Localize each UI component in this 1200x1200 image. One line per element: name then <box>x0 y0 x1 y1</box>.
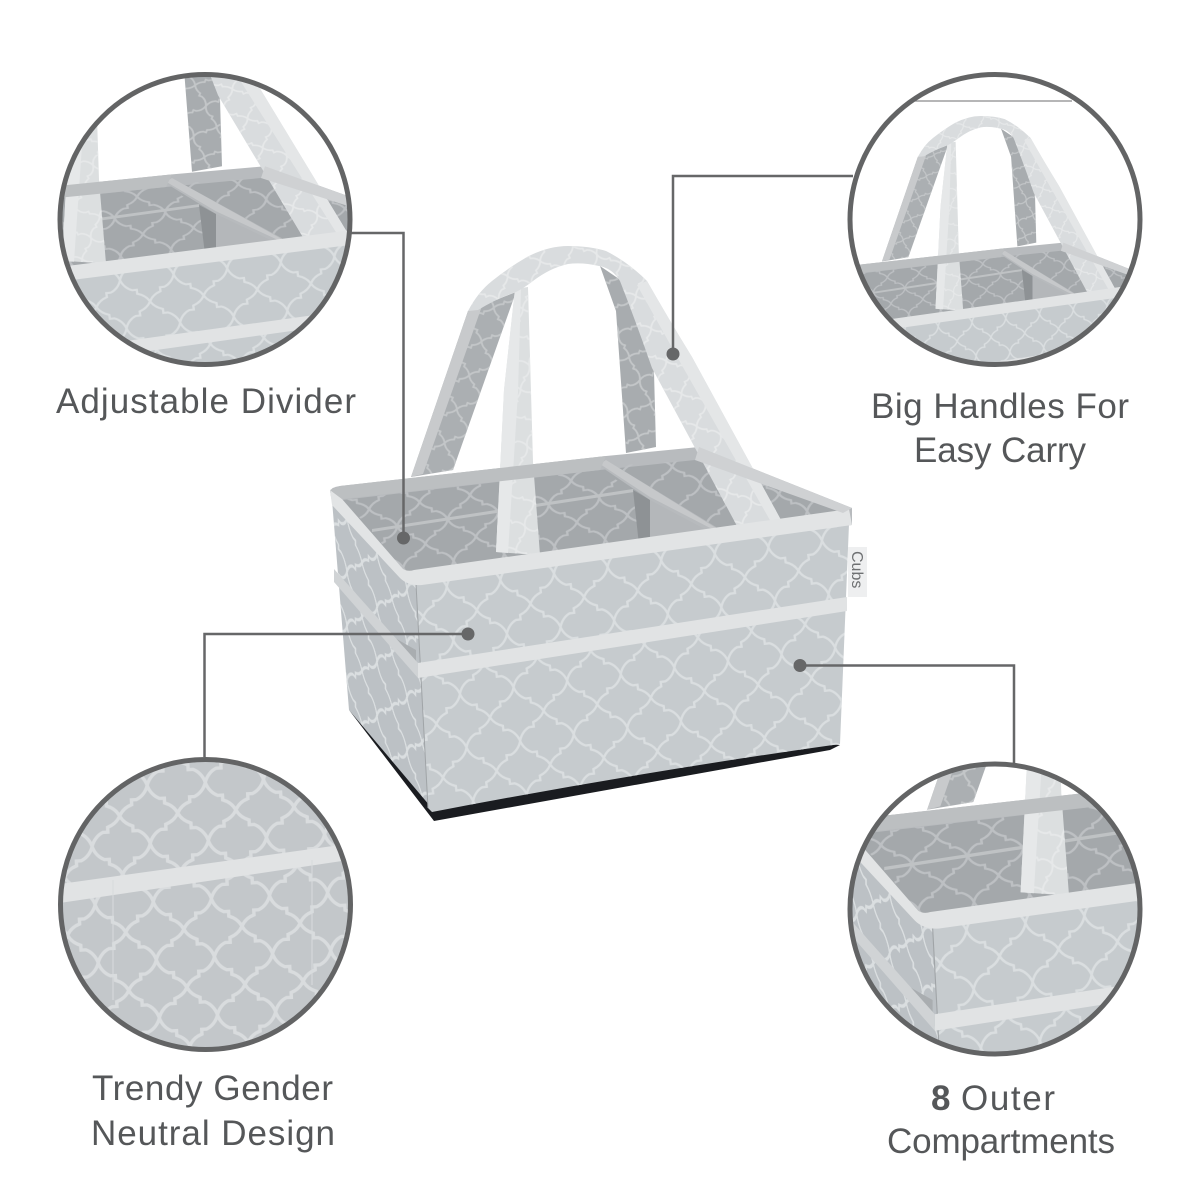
label: outer compartments: Compartments <box>887 1122 1115 1161</box>
caddy interior walls <box>342 460 843 569</box>
label: big handles <box>871 387 1129 470</box>
leader line: big handles <box>666 176 853 360</box>
back right handle leg <box>600 266 656 453</box>
panel: fabric pattern detail circle <box>55 755 355 1055</box>
central product: fabric caddy <box>330 246 852 821</box>
top arc and front right handle leg <box>468 246 781 526</box>
front rim binding <box>330 447 852 585</box>
label: outer compartments: Outer <box>961 1079 1055 1118</box>
label: big handles: Big Handles For <box>871 387 1129 426</box>
caddy back rim <box>330 447 852 585</box>
front left handle leg <box>496 287 540 555</box>
adjustable divider panels <box>372 460 716 578</box>
panel: adjustable divider detail circle <box>58 72 352 367</box>
leader line: adjustable divider <box>345 233 410 544</box>
brand tag <box>848 547 867 597</box>
label: outer compartments <box>887 1079 1115 1161</box>
caddy side panel <box>332 500 428 808</box>
black base <box>349 710 840 821</box>
label: gender neutral design <box>91 1069 335 1153</box>
pocket strap <box>334 569 847 678</box>
label: gender neutral design: Trendy Gender <box>92 1069 333 1108</box>
label: big handles: Easy Carry <box>914 431 1086 470</box>
panel: big handles detail circle <box>848 72 1142 367</box>
caddy front panel <box>416 524 849 812</box>
back left handle leg <box>411 292 516 477</box>
leader line: gender neutral design <box>204 628 474 757</box>
panel: outer compartments detail circle <box>848 762 1142 1056</box>
brand tag text: Cubs <box>848 551 865 588</box>
label: adjustable divider: Adjustable Divider <box>56 382 356 421</box>
leader line: outer compartments <box>794 659 1014 765</box>
label: gender neutral design: Neutral Design <box>91 1114 335 1153</box>
label: outer compartments: 8 <box>931 1079 950 1118</box>
